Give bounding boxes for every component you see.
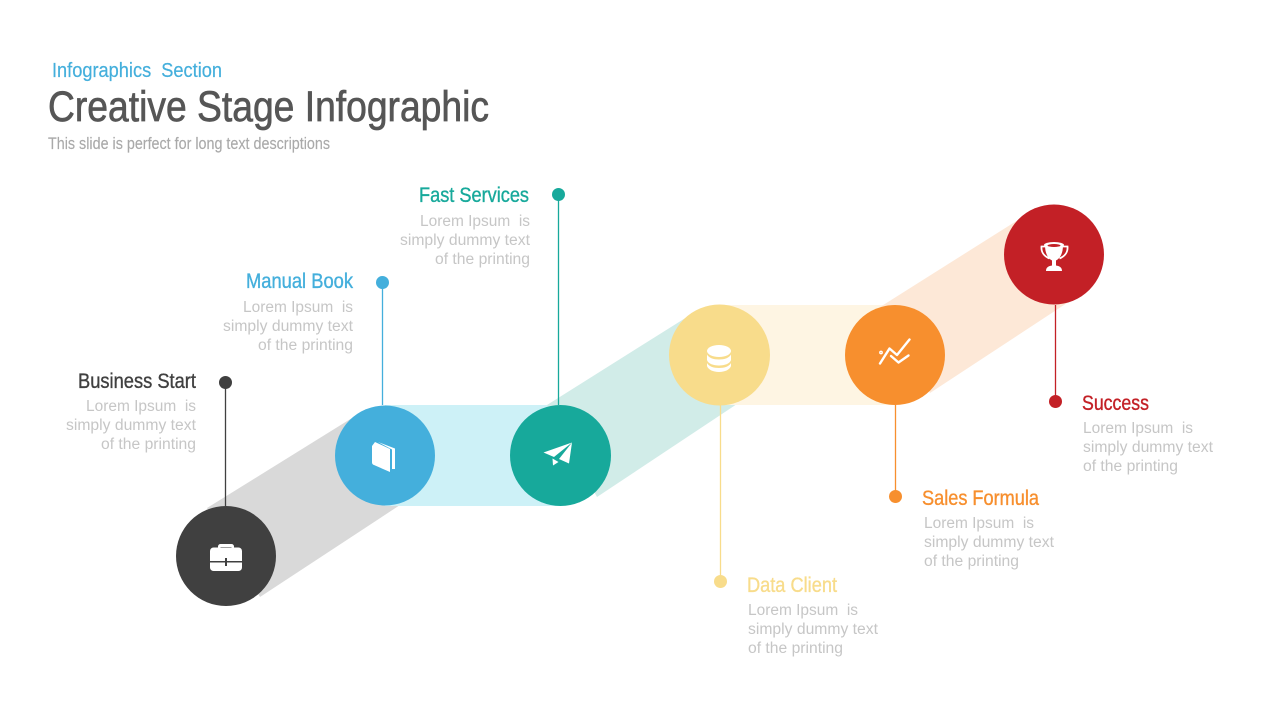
description: Lorem Ipsum is bbox=[243, 299, 353, 316]
band: light blue horizontal bbox=[385, 405, 560, 506]
label: Manual Book bbox=[246, 270, 353, 293]
stage: Manual Book bbox=[223, 270, 435, 506]
description: Lorem Ipsum is bbox=[86, 398, 196, 415]
description: of the printing bbox=[748, 640, 843, 657]
band: light teal diagonal bbox=[547, 317, 740, 497]
connector line bbox=[1054, 305, 1056, 401]
description bbox=[1083, 420, 1214, 475]
label: Success bbox=[1082, 392, 1149, 415]
label: Sales Formula bbox=[922, 487, 1039, 510]
description bbox=[223, 299, 354, 354]
connector line bbox=[224, 382, 226, 506]
icon: database bbox=[707, 345, 731, 372]
marker dot bbox=[714, 575, 727, 588]
description: of the printing bbox=[435, 251, 530, 268]
stage: Data Client bbox=[669, 304, 879, 657]
description: Lorem Ipsum is bbox=[924, 515, 1034, 532]
description: Lorem Ipsum is bbox=[748, 602, 858, 619]
description: of the printing bbox=[258, 337, 353, 354]
circle bbox=[1004, 204, 1104, 304]
icon: briefcase bbox=[210, 544, 242, 571]
connector line bbox=[894, 405, 896, 496]
description: Lorem Ipsum is bbox=[1083, 420, 1193, 437]
description: Lorem Ipsum is bbox=[420, 213, 530, 230]
description: simply dummy text bbox=[1083, 439, 1214, 456]
circle bbox=[669, 304, 770, 406]
description: simply dummy text bbox=[400, 232, 531, 249]
description: of the printing bbox=[101, 436, 196, 453]
description: of the printing bbox=[1083, 458, 1178, 475]
stage: Fast Services bbox=[400, 184, 611, 506]
description: simply dummy text bbox=[924, 534, 1055, 551]
title: Creative Stage Infographic bbox=[48, 83, 489, 131]
heading block bbox=[48, 60, 489, 153]
circle bbox=[845, 305, 945, 405]
icon: book bbox=[372, 442, 395, 472]
marker dot bbox=[889, 490, 902, 503]
circle bbox=[335, 406, 435, 506]
marker dot bbox=[1049, 395, 1062, 408]
stage: Sales Formula bbox=[845, 305, 1055, 570]
connector line bbox=[720, 405, 722, 581]
description: of the printing bbox=[924, 553, 1019, 570]
description: simply dummy text bbox=[66, 417, 197, 434]
band: light yellow horizontal bbox=[720, 305, 895, 405]
section label: Infographics Section bbox=[52, 60, 222, 82]
label: Business Start bbox=[78, 370, 196, 393]
label: Data Client bbox=[747, 574, 837, 597]
connector line bbox=[558, 194, 560, 405]
label: Fast Services bbox=[419, 184, 529, 207]
description bbox=[924, 515, 1055, 570]
description bbox=[400, 213, 531, 268]
icon: paper plane bbox=[544, 442, 572, 466]
description: simply dummy text bbox=[748, 621, 879, 638]
stage: Success bbox=[1004, 204, 1214, 475]
icon: line chart bbox=[880, 340, 910, 364]
marker dot bbox=[376, 276, 389, 289]
circle bbox=[510, 405, 611, 506]
band: peach diagonal bbox=[880, 220, 1067, 393]
connector line bbox=[382, 282, 384, 405]
band: gray diagonal bbox=[207, 418, 400, 597]
stage path bands bbox=[207, 220, 1067, 597]
description bbox=[66, 398, 197, 453]
subtitle: This slide is perfect for long text descriptions bbox=[48, 134, 330, 153]
stage: Business Start bbox=[66, 370, 276, 606]
marker dot bbox=[219, 376, 232, 389]
circle bbox=[176, 506, 276, 606]
marker dot bbox=[552, 188, 565, 201]
description bbox=[748, 602, 879, 657]
description: simply dummy text bbox=[223, 318, 354, 335]
icon: trophy bbox=[1041, 242, 1068, 271]
